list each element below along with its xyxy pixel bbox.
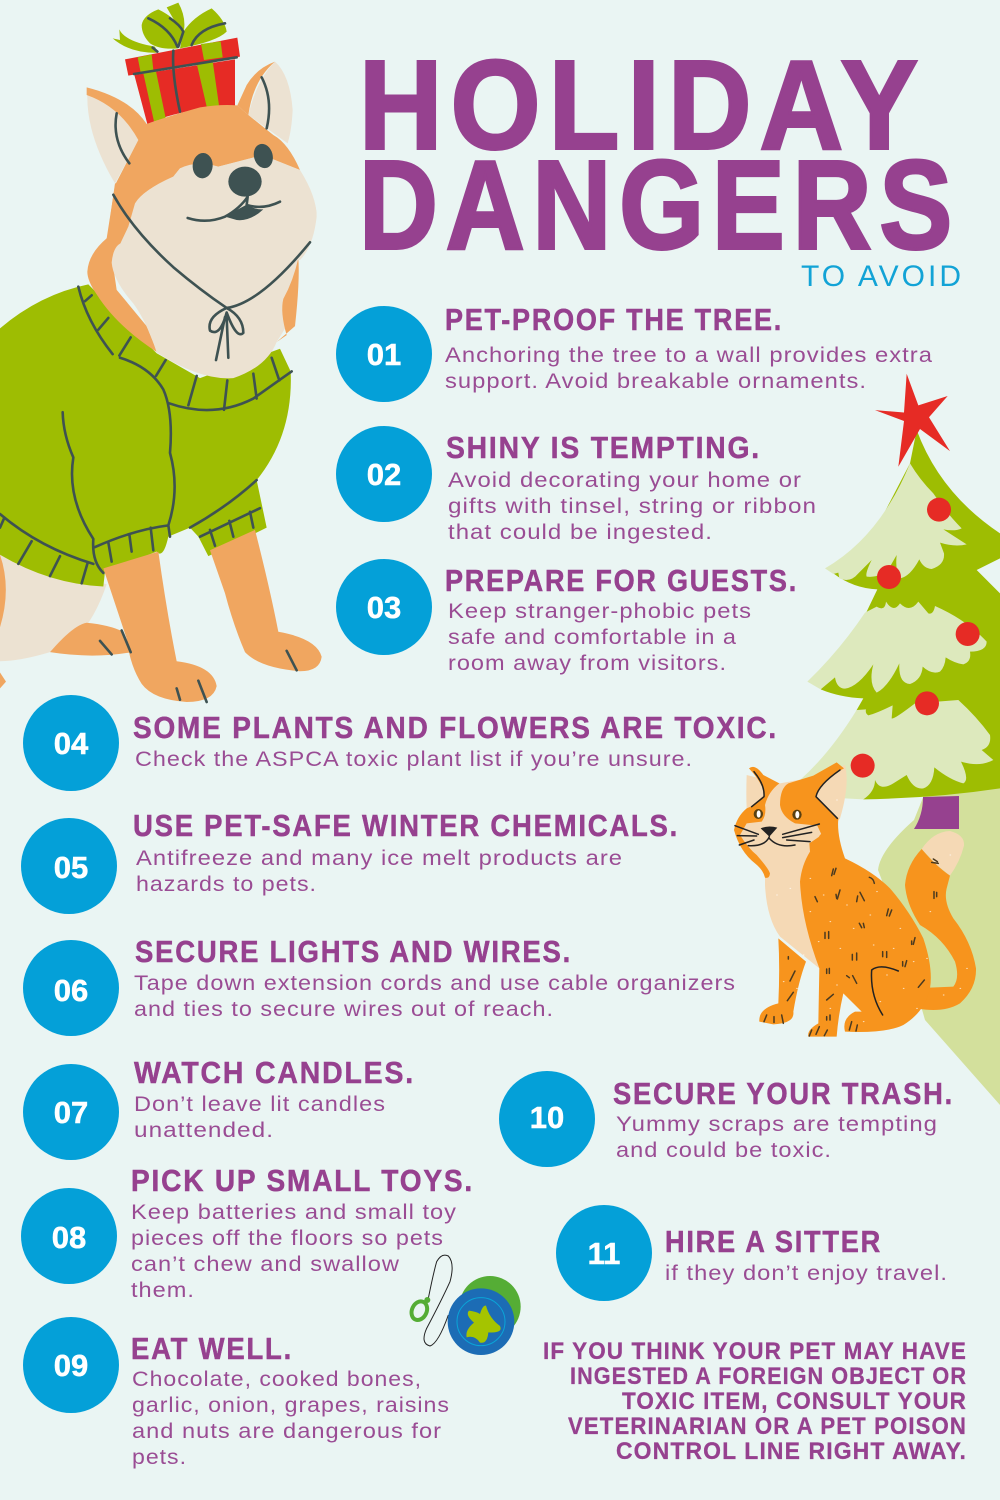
tip 11: if they don’t enjoy travel. [665, 1262, 948, 1285]
tip 02: SHINY IS TEMPTING. [446, 430, 761, 465]
tip 03: Keep stranger-phobic pets [448, 600, 752, 623]
tip 09: EAT WELL. [131, 1331, 293, 1366]
callout: consult your veterinarian: IF YOU THINK YOUR PET MAY HAVE [543, 1338, 967, 1365]
tip 06 [23, 934, 736, 1036]
tip 05: hazards to pets. [136, 873, 317, 896]
tip 10: Yummy scraps are tempting [616, 1113, 938, 1136]
tip 05: Antifreeze and many ice melt products are [136, 847, 623, 870]
tip 01: Anchoring the tree to a wall provides extra [445, 344, 933, 367]
tip 05: 05 [54, 850, 88, 885]
tip 04: SOME PLANTS AND FLOWERS ARE TOXIC. [133, 710, 778, 745]
tip 04: Check the ASPCA toxic plant list if you’re unsure. [135, 748, 693, 771]
tip 06: Tape down extension cords and use cable organizers [134, 972, 736, 995]
tip 01 [336, 302, 933, 402]
tip 08: 08 [52, 1220, 86, 1255]
tip 07: Don’t leave lit candles [134, 1093, 386, 1116]
tip 01: support. Avoid breakable ornaments. [445, 370, 867, 393]
title [359, 34, 960, 276]
tip 08: them. [131, 1279, 195, 1302]
tip 07: 07 [54, 1095, 88, 1130]
tip 03: 03 [367, 590, 401, 625]
tip 06: and ties to secure wires out of reach. [134, 998, 554, 1021]
callout: consult your veterinarian: CONTROL LINE RIGHT AWAY. [616, 1438, 967, 1465]
tip 08 [21, 1163, 474, 1302]
icon: gift on head [113, 3, 240, 124]
tip 08: can’t chew and swallow [131, 1253, 400, 1276]
illustration: christmas tree [800, 374, 1000, 1105]
tip 09: pets. [132, 1446, 187, 1469]
tip 11: HIRE A SITTER [665, 1224, 882, 1259]
tip 10: 10 [530, 1100, 564, 1135]
tip 08: Keep batteries and small toy [131, 1201, 457, 1224]
tip 03: PREPARE FOR GUESTS. [445, 563, 798, 598]
icon: ornaments [851, 498, 980, 778]
tip 06: SECURE LIGHTS AND WIRES. [135, 934, 572, 969]
tip 06: 06 [54, 973, 88, 1008]
icon: yo-yo toy [409, 1255, 521, 1355]
tip 04 [23, 695, 778, 791]
tip 11 [556, 1205, 948, 1301]
tip 02: gifts with tinsel, string or ribbon [448, 495, 817, 518]
tip 08: pieces off the floors so pets [131, 1227, 444, 1250]
tip 10: and could be toxic. [616, 1139, 832, 1162]
tip 01: PET-PROOF THE TREE. [445, 302, 783, 337]
illustration: dog in green sweater with gift [0, 3, 322, 702]
tip 03 [336, 559, 798, 675]
subtitle: TO AVOID [801, 260, 961, 293]
tip 02: that could be ingested. [448, 521, 713, 544]
tip 10 [499, 1071, 954, 1167]
dog head [87, 62, 317, 260]
callout: consult your veterinarian: TOXIC ITEM, CONSULT YOUR [622, 1388, 967, 1415]
tip 07: WATCH CANDLES. [134, 1055, 415, 1090]
tip 09: 09 [54, 1348, 88, 1383]
tip 03: safe and comfortable in a [448, 626, 737, 649]
tip 05 [21, 808, 679, 914]
sweater and collar lines [0, 195, 310, 702]
tip 02: Avoid decorating your home or [448, 469, 802, 492]
tip 03: room away from visitors. [448, 652, 727, 675]
tip 09: Chocolate, cooked bones, [132, 1368, 422, 1391]
tip 02 [336, 426, 817, 544]
tip 05: USE PET-SAFE WINTER CHEMICALS. [133, 808, 679, 843]
tip 09: and nuts are dangerous for [132, 1420, 442, 1443]
title: HOLIDAY [359, 34, 926, 176]
tip 11: 11 [588, 1236, 620, 1271]
callout: consult your veterinarian: VETERINARIAN OR A PET POISON [568, 1413, 967, 1440]
tip 08: PICK UP SMALL TOYS. [131, 1163, 474, 1198]
tip 09 [23, 1317, 450, 1469]
tip 01: 01 [367, 337, 401, 372]
tip 07: unattended. [134, 1119, 274, 1142]
tip 07 [23, 1055, 415, 1160]
illustration: orange cat [734, 762, 976, 1037]
tip 02: 02 [367, 457, 401, 492]
icon: star tree topper [875, 374, 950, 467]
callout: consult your veterinarian [543, 1338, 967, 1465]
tip 10: SECURE YOUR TRASH. [613, 1076, 954, 1111]
tip 09: garlic, onion, grapes, raisins [132, 1394, 450, 1417]
tip 04: 04 [54, 726, 89, 761]
